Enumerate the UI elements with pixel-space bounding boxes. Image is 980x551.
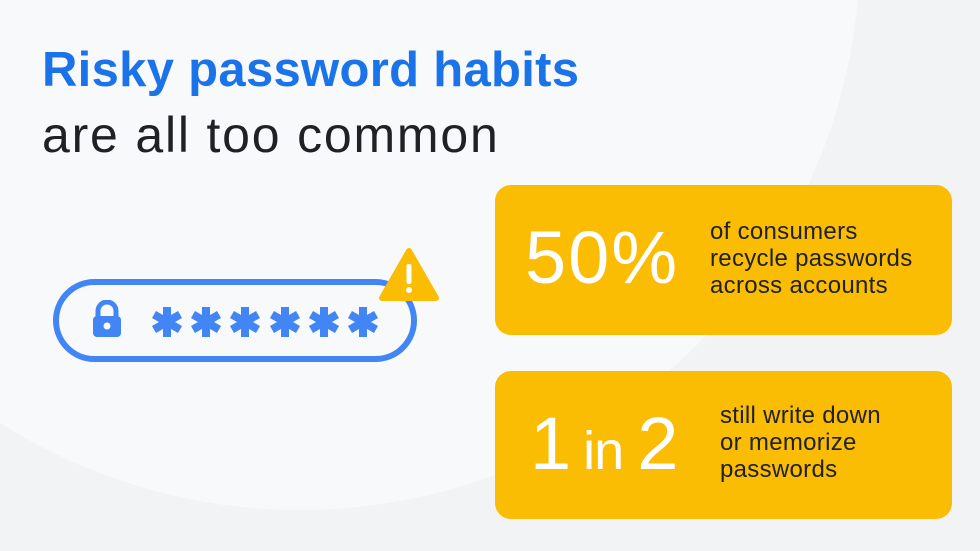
stat description: or memorize	[720, 429, 857, 456]
stat description: passwords	[720, 456, 837, 483]
stat description: still write down	[720, 402, 881, 429]
stat card: 1 in 2	[495, 371, 952, 519]
stat description	[710, 218, 913, 299]
icon: warning triangle	[379, 248, 439, 301]
stat description: recycle passwords	[710, 245, 913, 272]
stat number: 1 in 2	[530, 402, 676, 485]
title: Risky password habits	[42, 43, 579, 97]
stat card: 50%	[495, 185, 952, 335]
icon: asterisks	[152, 307, 378, 337]
pill field	[53, 279, 417, 362]
subtitle: are all too common	[42, 107, 500, 163]
stat description: across accounts	[710, 272, 888, 299]
password field illustration	[53, 248, 439, 362]
stat number: 50%	[525, 216, 679, 299]
icon: lock	[93, 300, 121, 337]
stat description: of consumers	[710, 218, 858, 245]
stat description	[720, 402, 881, 483]
